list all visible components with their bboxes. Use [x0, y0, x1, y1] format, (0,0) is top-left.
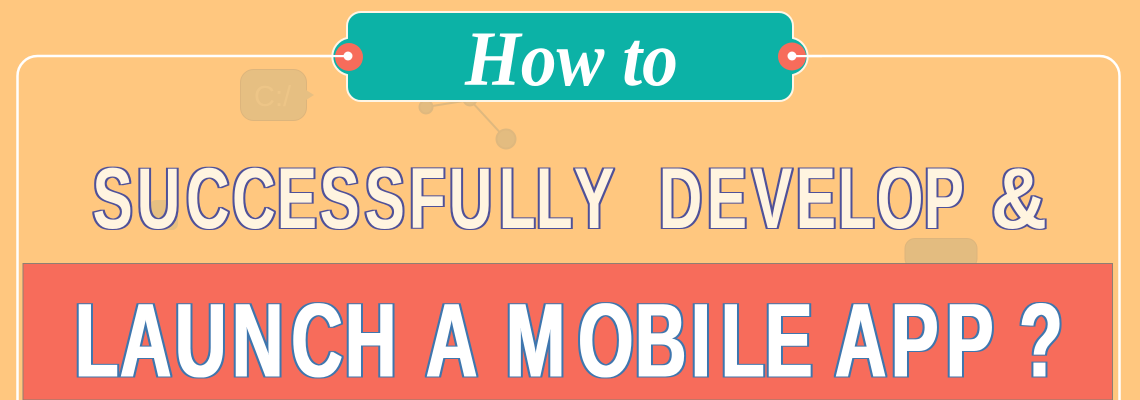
- heading line 2: APP: [835, 282, 993, 399]
- heading line 1: [93, 150, 1047, 247]
- heading line 2: LAUNCH: [75, 282, 396, 399]
- icon: command prompt bubble: C:/: [254, 81, 292, 113]
- red banner: [23, 264, 1112, 400]
- icon: faint rounded tab above banner: [905, 238, 977, 268]
- heading line 1: SUCCESSFULLY: [93, 150, 614, 247]
- right connector: [778, 42, 822, 70]
- icon: command prompt bubble: [240, 70, 314, 120]
- badge shape: [332, 12, 808, 101]
- badge text: How to: [464, 15, 678, 102]
- icon: faint square behind heading: [150, 200, 178, 230]
- heading line 2: MOBILE: [506, 282, 812, 399]
- icon: connected nodes: [420, 92, 516, 148]
- title badge: How to: [320, 12, 822, 102]
- heading line 1: DEVELOP: [659, 150, 964, 247]
- left connector: [320, 43, 363, 71]
- heading line 1: &: [991, 151, 1047, 247]
- heading line 2: ?: [1019, 282, 1063, 399]
- heading line 2: A: [426, 282, 477, 399]
- heading line 2: [75, 282, 1063, 399]
- faint background icons: [150, 70, 977, 268]
